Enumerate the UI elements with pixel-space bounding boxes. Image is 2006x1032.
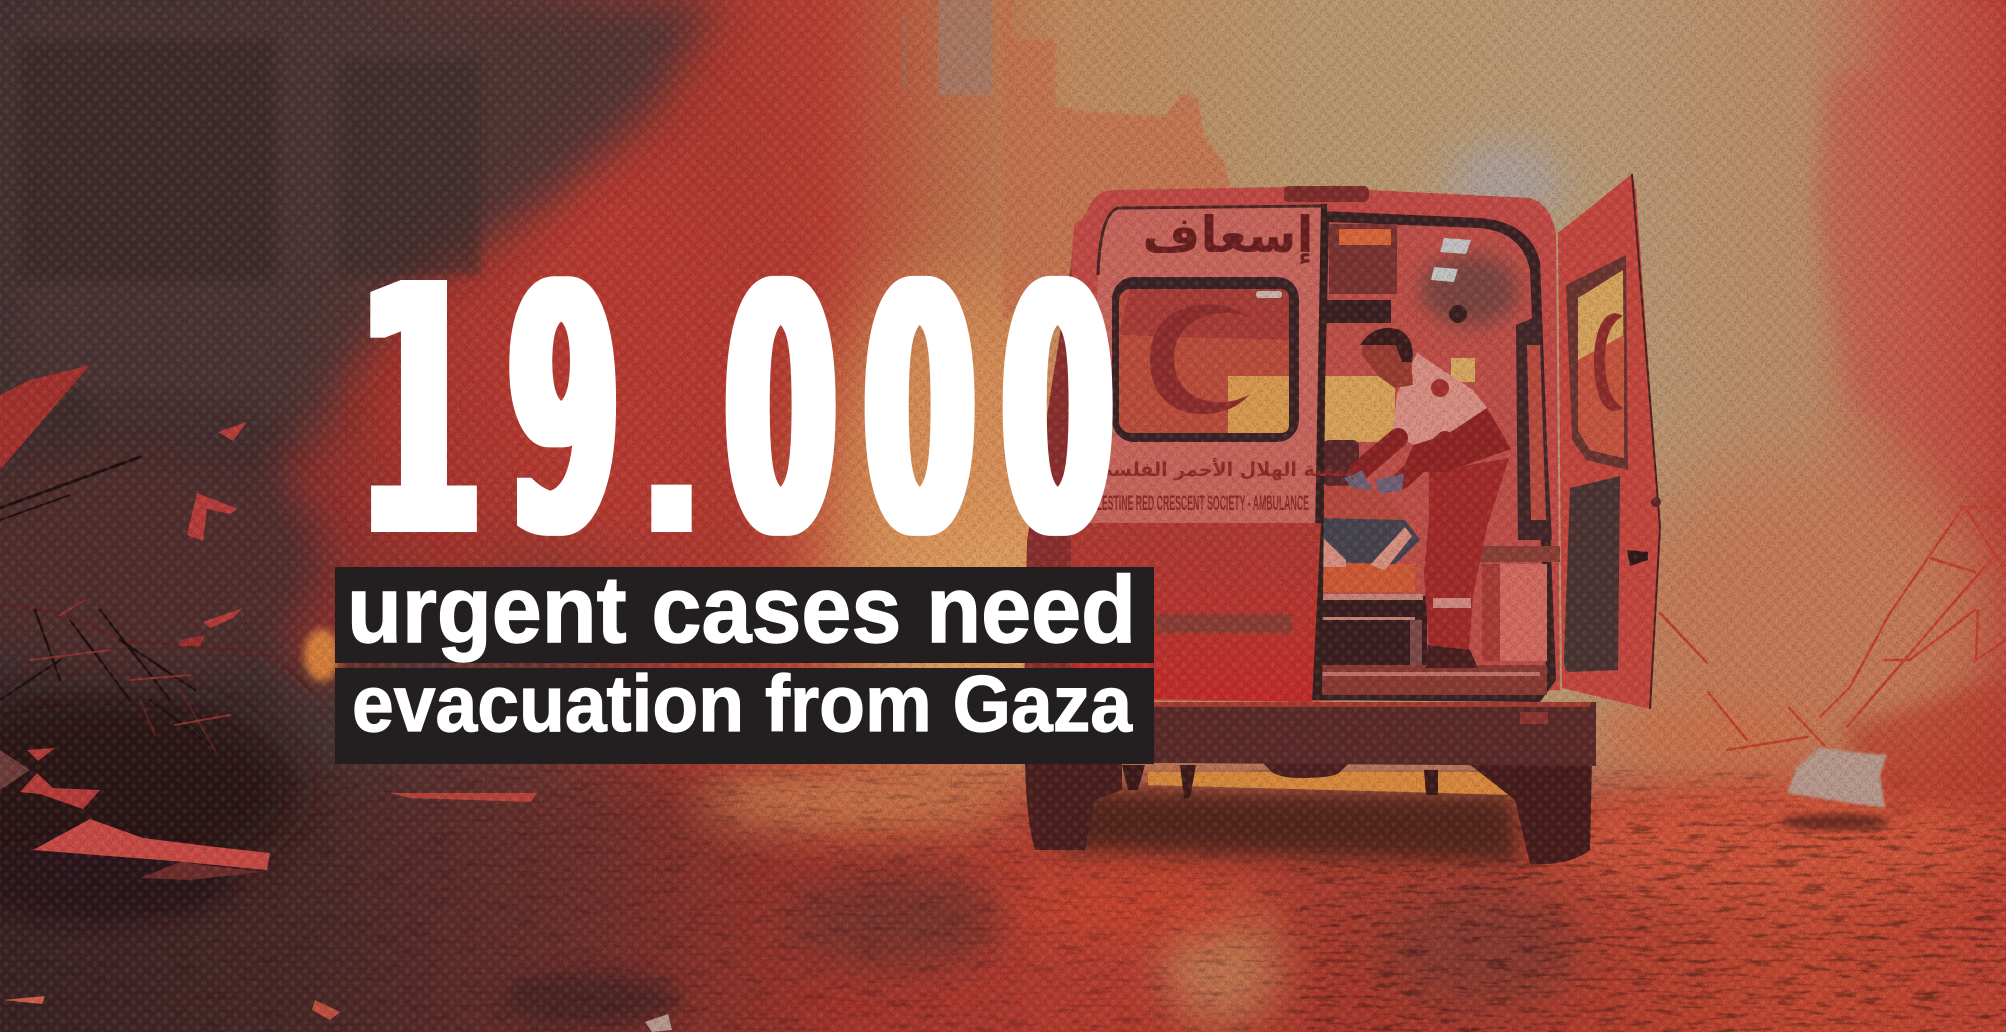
arabic society name: جمعية الهلال الأحمر الفلسطيني	[1060, 458, 1360, 481]
door window dark frame	[1566, 255, 1628, 470]
paramedic	[1344, 328, 1511, 668]
crescent on door window	[1150, 304, 1250, 414]
stretcher rails	[1317, 594, 1423, 668]
big number: 19.000: 0	[864, 214, 975, 611]
interior side door frame	[1516, 315, 1552, 540]
door window	[1578, 270, 1624, 458]
shirt	[1321, 485, 1408, 530]
dark rubble mass, left	[0, 440, 320, 920]
differential	[1262, 762, 1350, 778]
floor step	[1315, 665, 1547, 695]
shadow under bag	[1780, 814, 1890, 830]
dome light two	[1431, 267, 1458, 282]
plastic bag	[1787, 747, 1887, 808]
building tower, top centre	[903, 0, 992, 95]
door upper outline	[1098, 206, 1321, 275]
ground shadow	[1060, 790, 1520, 862]
left interior column	[1329, 224, 1397, 294]
door groove	[1156, 614, 1292, 633]
big number: 19.000: 0	[1002, 214, 1113, 611]
door window glass	[1119, 289, 1289, 433]
arm	[1358, 438, 1398, 472]
hair	[1360, 328, 1413, 362]
big number: 19.000: 1	[357, 213, 482, 612]
big number: 19.000: 0	[725, 214, 836, 611]
foot right	[1370, 527, 1412, 570]
door upper panel	[1084, 206, 1321, 523]
door crescent	[1594, 313, 1623, 411]
badge	[1431, 379, 1449, 397]
forearm	[1402, 440, 1445, 480]
bench top	[1480, 546, 1560, 562]
debris and plastic bag, right	[1660, 507, 2006, 830]
suspension parts	[1122, 765, 1438, 798]
left wheel	[1025, 760, 1122, 850]
dark smoke wedge, top left	[0, 0, 720, 420]
debris lines and branches	[0, 457, 312, 750]
mattress	[1319, 564, 1415, 592]
ambulance	[1024, 174, 1661, 864]
arabic word: ambulance: إسعاف	[1142, 206, 1314, 265]
door handle	[1627, 550, 1648, 566]
roof light	[1284, 186, 1369, 202]
road speckle, right	[1300, 820, 2006, 1032]
interior of van	[1310, 211, 1560, 702]
boots	[1425, 645, 1478, 668]
interior yellow window	[1323, 376, 1395, 442]
right wheel	[1464, 760, 1592, 864]
dark panel	[1326, 300, 1391, 323]
road streak texture	[0, 770, 2006, 1032]
red building silhouette, top right	[1815, 0, 2006, 500]
door window frame	[1112, 277, 1299, 442]
face	[1362, 345, 1413, 388]
big number: 19.000: .	[643, 309, 700, 589]
big number: 19.000: 9	[508, 214, 619, 611]
debris, left	[0, 365, 672, 1032]
door dark panel	[1564, 476, 1620, 672]
dark vent	[1449, 305, 1467, 323]
orange ceiling strip	[1339, 229, 1391, 245]
left rear door	[1060, 204, 1360, 702]
building silhouette behind ambulance	[1003, 0, 1232, 320]
door lower panel	[1071, 523, 1321, 702]
rear yellow window	[1451, 358, 1475, 382]
reflective band	[1433, 598, 1471, 608]
lower jacket	[1402, 408, 1511, 472]
subtitle banner line 1: urgent cases need	[347, 557, 1136, 663]
bench box	[1500, 564, 1547, 661]
dome light one	[1440, 238, 1471, 254]
lower interior dark	[1317, 596, 1427, 674]
seat back	[1323, 440, 1359, 486]
legs	[1424, 458, 1509, 651]
small fire glow	[304, 629, 340, 681]
body side, left	[1024, 265, 1100, 700]
bright shards	[0, 422, 672, 1032]
gloves	[1344, 470, 1404, 494]
roof shell	[1071, 187, 1560, 702]
twisted metal rods	[1660, 507, 2006, 757]
mound behind bag	[1840, 683, 2006, 800]
foot left	[1321, 536, 1346, 567]
subtitle banner line 2: evacuation from Gaza	[352, 659, 1132, 748]
big number: 19.000	[357, 213, 1113, 612]
broken sheet	[0, 365, 90, 470]
patient on stretcher	[1319, 485, 1420, 592]
light under the vehicle	[1148, 772, 1515, 795]
left rear door: PALESTINE RED CRESCENT SOCIETY - AMBULANCE	[1085, 492, 1309, 515]
ruined buildings, left	[20, 40, 480, 720]
upper jacket	[1393, 353, 1487, 445]
right rear door, open	[1558, 174, 1661, 709]
road surface	[0, 740, 2006, 1032]
trousers	[1321, 518, 1420, 564]
bumper	[1030, 702, 1596, 766]
road glow patches	[500, 705, 2000, 1027]
dark ceiling patch	[1420, 254, 1520, 326]
